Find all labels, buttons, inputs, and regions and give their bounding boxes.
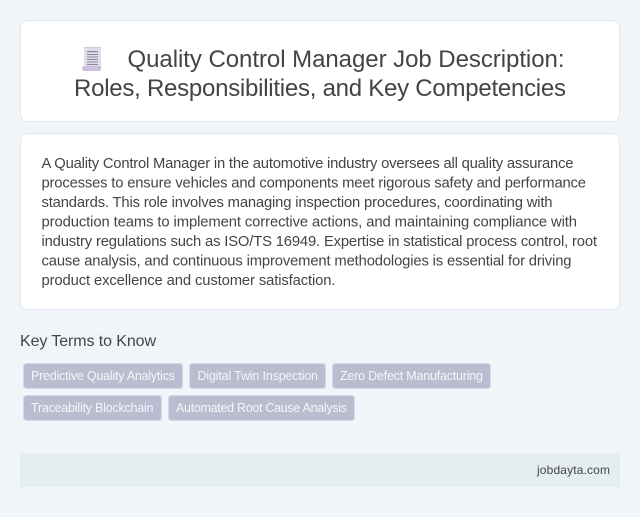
icon: document scroll [82,47,101,71]
chip: digital twin inspection [190,364,326,388]
panel: description card [20,134,620,310]
text block: description: product excellence and customer satisfaction. [42,273,336,289]
chip: automated root cause analysis [168,396,354,420]
chip: zero defect manufacturing [332,364,490,388]
text block: description: production teams to implement corrective actions, and maintaining compliance with [42,214,577,230]
chip: traceability blockchain: Traceability Blockchain [31,401,154,415]
footer text: jobdayta.com [536,463,610,477]
text block: description: processes to ensure vehicles and components meet rigorous safety and performance [42,176,586,192]
text block: description: cause analysis, and continuous improvement methodologies is essential for driving [42,254,572,270]
panel: header card [20,20,620,122]
chip: zero defect manufacturing: Zero Defect Manufacturing [340,369,483,383]
heading: key terms: Key Terms to Know [20,333,156,350]
text block: description: industry regulations such as ISO/TS 16949. Expertise in statistical process control, root [42,234,597,250]
text block: description: A Quality Control Manager in the automotive industry oversees all quality assurance [42,156,574,172]
title [74,46,566,102]
footer [20,453,620,487]
chip: predictive quality analytics: Predictive Quality Analytics [31,369,175,383]
title: Roles, Responsibilities, and Key Competencies [74,75,566,102]
text block: description: standards. This role involves managing inspection procedures, coordinating with [42,195,552,211]
chip: digital twin inspection: Digital Twin Inspection [198,369,318,383]
chip: traceability blockchain [24,396,162,420]
chip: automated root cause analysis: Automated Root Cause Analysis [176,401,347,415]
title: Quality Control Manager Job Description: [128,46,564,73]
chip: predictive quality analytics [24,364,182,388]
chips: key terms [24,364,490,420]
text block: description [42,156,597,289]
